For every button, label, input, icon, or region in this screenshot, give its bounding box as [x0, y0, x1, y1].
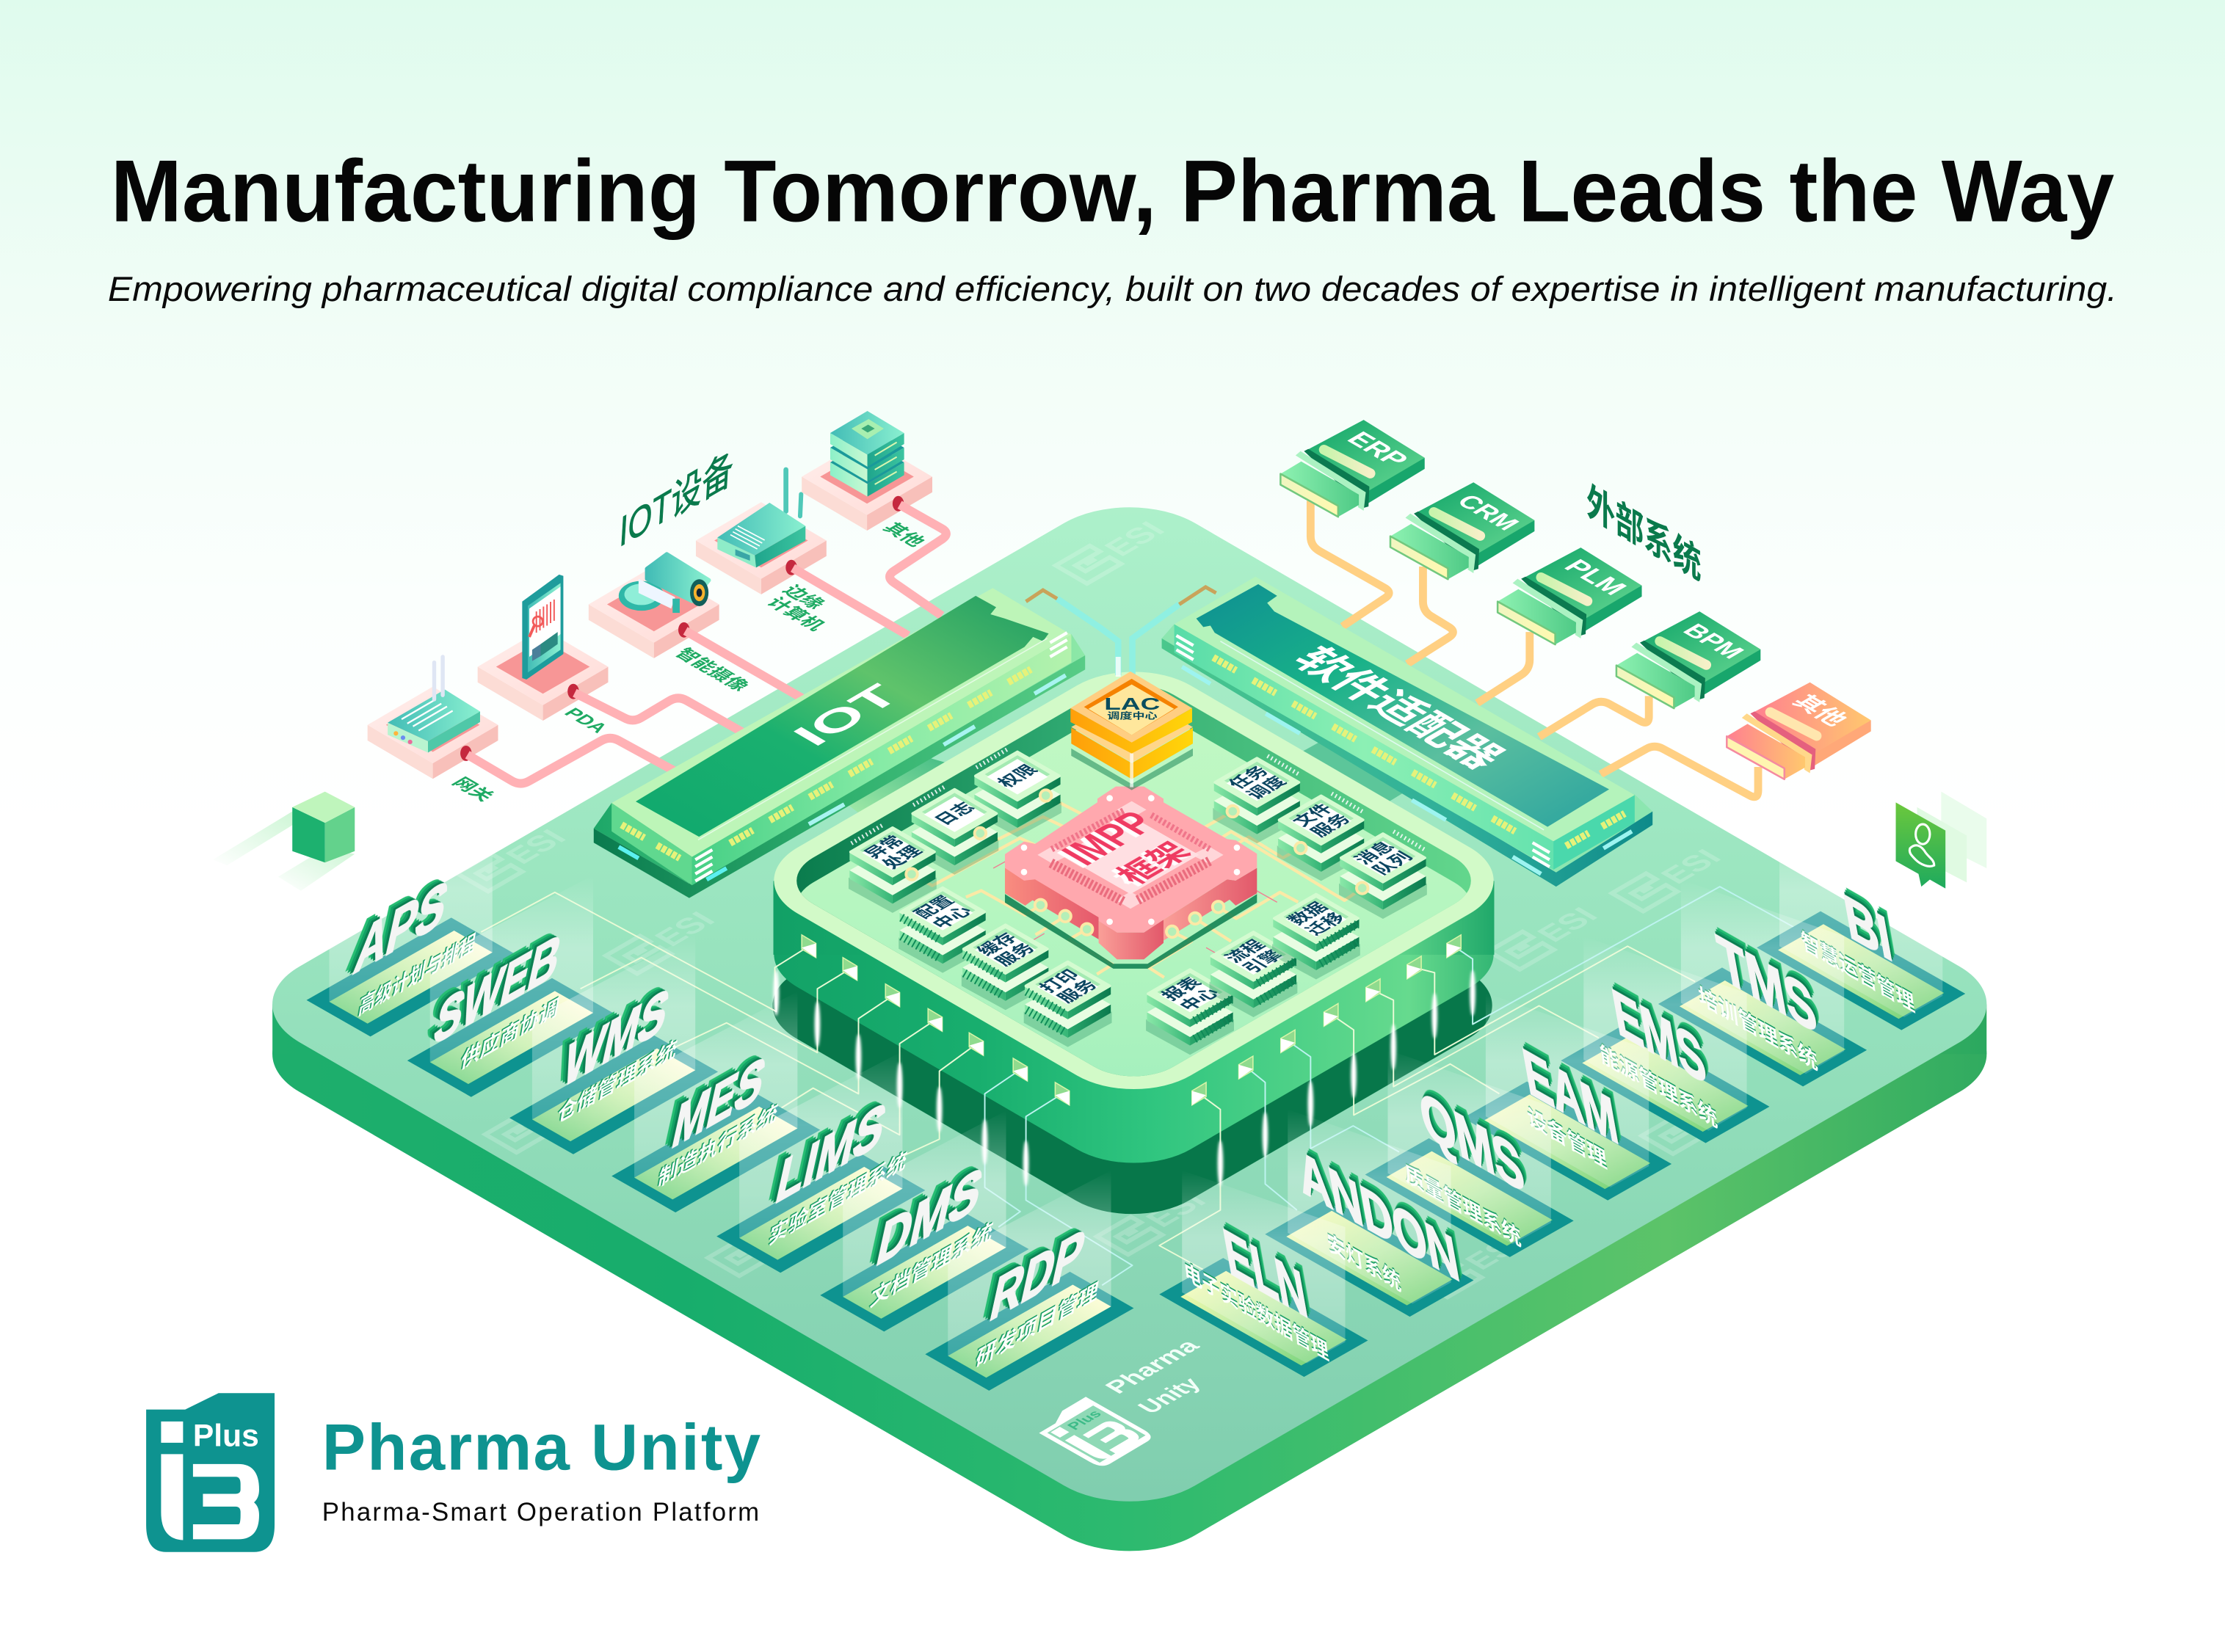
card: other [1727, 683, 1871, 779]
module: 打印服务: 打印 [1035, 967, 1084, 995]
device: camera [589, 554, 719, 658]
cyan connectors from LAC [1026, 587, 1216, 677]
watermarks: ESI [498, 825, 573, 868]
system box: ELN [1159, 1171, 1368, 1377]
module: 文件服务 [1277, 793, 1365, 881]
main platform [234, 485, 2025, 1573]
logo: i3 Plus [146, 1393, 275, 1552]
module: 报表中心: 中心 [1175, 985, 1224, 1014]
module: 打印服务: 服务 [1053, 978, 1102, 1005]
text: LAC: LAC [1104, 694, 1161, 713]
module: 流程引擎: 流程 [1221, 937, 1270, 966]
system box: WMS: 仓储管理系统 [556, 1036, 679, 1128]
lines: external system connectors [1310, 501, 1758, 797]
module: 权限 [973, 749, 1061, 837]
text: IOT: IOT [782, 678, 910, 752]
watermarks: ESI [1175, 729, 1250, 774]
floating chat icon [1896, 792, 1986, 889]
label: edge computer: 计算机 [762, 594, 830, 633]
watermarks: ESI [647, 907, 722, 950]
system box: BI [1757, 823, 1965, 1030]
system box: EMS [1561, 936, 1769, 1143]
plugs on device lines [460, 496, 904, 761]
LAC dispatch center [1070, 672, 1193, 790]
system box: DMS: 文档管理系统 [868, 1218, 995, 1312]
module: 消息队列 [1339, 830, 1427, 919]
module: 任务调度 [1213, 754, 1301, 843]
system box: EMS: 能源管理系统 [1598, 1041, 1719, 1132]
subtitle: Empowering pharmaceutical digital compliance and efficiency, built on two decades of expertise in intelligent manufacturing. [108, 270, 2117, 309]
circuit pads [906, 790, 1368, 937]
ports on center block [802, 935, 1461, 1105]
system box: ANDON: 安灯系统 [1326, 1230, 1403, 1296]
system box: TMS [1658, 879, 1867, 1086]
system box: APS: 高级计划与排程 [357, 930, 477, 1020]
module: 消息队列: 消息 [1350, 839, 1399, 867]
system box: WMS [509, 934, 718, 1154]
module: 缓存服务: 服务 [991, 940, 1039, 969]
system box: BI: 智慧运营管理 [1800, 928, 1916, 1017]
brand tagline: Pharma-Smart Operation Platform [322, 1499, 759, 1527]
module: 打印服务 [1024, 962, 1112, 1047]
module: 日志: 日志 [930, 799, 979, 828]
system box: APS [307, 815, 515, 1036]
device: edge computer [696, 470, 827, 594]
platform brand mark [1032, 1336, 1208, 1469]
watermarks: ESI [526, 1086, 602, 1129]
system box: ELN: ELN [1219, 1215, 1313, 1333]
card: PLM [1498, 547, 1642, 644]
system box: ANDON: ANDON [1293, 1135, 1464, 1296]
text: Pharma: Pharma [1100, 1336, 1206, 1397]
module: 配置中心 [899, 888, 987, 973]
system box: EAM: EAM [1518, 1034, 1623, 1159]
watermarks: ESI [1530, 903, 1605, 947]
card: ERP [1280, 420, 1425, 517]
system box: APS: APS [349, 865, 454, 989]
module: 报表中心 [1146, 969, 1234, 1055]
system box: RDP [925, 1171, 1133, 1391]
card: PLM: PLM [1558, 556, 1633, 599]
system box: BI: BI [1839, 879, 1897, 975]
system box: MES [611, 991, 820, 1212]
system box: EAM [1463, 993, 1672, 1201]
module: 权限: 权限 [993, 762, 1042, 790]
module: 缓存服务 [962, 925, 1050, 1010]
watermarks: ESI [1097, 517, 1172, 561]
module: 数据迁移 [1272, 895, 1360, 980]
module: 任务调度: 任务 [1224, 763, 1273, 792]
system box: LIMS: LIMS [770, 1087, 892, 1218]
system box: SWEB [407, 876, 616, 1097]
device: gateway [368, 657, 498, 779]
line: IOT connectors to devices [468, 505, 946, 784]
card: BPM: BPM [1677, 620, 1749, 663]
watermarks: ESI [1138, 1188, 1213, 1231]
system box: QMS: QMS [1415, 1077, 1529, 1207]
heading: IOT devices: IOT设备 [618, 444, 735, 557]
module: 异常处理: 处理 [878, 843, 926, 872]
floating cube [213, 792, 355, 891]
light glows on lines [774, 970, 1476, 1186]
system box: QMS: 质量管理系统 [1404, 1160, 1522, 1251]
system box: RDP: RDP [984, 1214, 1091, 1336]
system box: DMS: DMS [871, 1152, 989, 1281]
logo: i3 Plus: Plus [193, 1419, 259, 1454]
watermarks: ESI [749, 1209, 824, 1253]
module: 流程引擎 [1210, 932, 1297, 1017]
card: ERP: ERP [1340, 428, 1415, 470]
module: 文件服务: 文件 [1288, 801, 1337, 829]
watermarks: ESI [1653, 845, 1728, 888]
title: Manufacturing Tomorrow, Pharma Leads the Way [111, 143, 2114, 241]
module: 日志 [910, 786, 998, 875]
watermarks: ESI [1457, 1231, 1533, 1274]
module: 缓存服务: 缓存 [973, 930, 1022, 958]
system box: RDP: 研发项目管理 [974, 1278, 1100, 1372]
module: 异常处理: 异常 [860, 833, 909, 862]
text: dispatch center: 调度中心 [1107, 710, 1158, 721]
block: software adapter [1162, 577, 1652, 887]
brand name: Pharma Unity [322, 1411, 761, 1484]
card: CRM [1390, 482, 1534, 579]
system box: LIMS: 实验室管理系统 [767, 1148, 909, 1251]
system box: WMS: WMS [558, 973, 675, 1102]
system box: DMS [820, 1111, 1028, 1331]
text: IMPP: IMPP [1050, 804, 1166, 872]
module: 数据迁移: 迁移 [1302, 910, 1350, 938]
label: gateway: 网关 [448, 774, 498, 804]
system box: LIMS [716, 1051, 925, 1273]
device: server stack [802, 411, 932, 531]
module: 数据迁移: 数据 [1283, 900, 1332, 928]
system box: ANDON [1265, 1110, 1473, 1317]
card: CRM: CRM [1451, 491, 1525, 534]
lines: modules to ports [481, 887, 1795, 1285]
chip: IMPP framework [1005, 787, 1257, 969]
system box: MES: 制造执行系统 [656, 1100, 780, 1192]
module: 消息队列: 队列 [1368, 849, 1417, 878]
platform brand mark: Plus [1064, 1408, 1106, 1433]
text: software adapter title: 软件适配器 [1283, 641, 1515, 775]
system box: SWEB: 供应商协调 [459, 994, 561, 1074]
system box: EMS: EMS [1607, 975, 1711, 1099]
label: PDA: PDA [559, 705, 611, 736]
watermarks [457, 516, 1758, 1298]
system box: TMS: TMS [1712, 921, 1822, 1048]
system box: EAM: 设备管理 [1526, 1104, 1608, 1173]
text: framework: 框架 [1111, 838, 1198, 889]
block: IOT [594, 588, 1085, 898]
device: PDA [478, 575, 609, 721]
module: 流程引擎: 引擎 [1238, 947, 1288, 976]
system box: MES: MES [667, 1041, 772, 1162]
module: 报表中心: 报表 [1157, 975, 1207, 1003]
system box: QMS [1365, 1049, 1574, 1257]
watermarks: ESI [1683, 1087, 1758, 1131]
heading: external systems: 外部系统 [1586, 479, 1702, 589]
label: other devices: 其他 [879, 520, 929, 550]
module: 任务调度: 调度 [1242, 774, 1291, 802]
label: smart camera: 智能摄像 [670, 646, 754, 694]
text: other: 其他 [1787, 691, 1852, 729]
circuit traces [912, 796, 1362, 978]
connector ramps to center [843, 739, 1415, 818]
text: Unity: Unity [1133, 1374, 1208, 1417]
module: 配置中心: 中心 [928, 903, 977, 932]
module: 异常处理 [849, 824, 937, 913]
system box: ELN: 电子实验数据管理 [1183, 1259, 1330, 1366]
card: BPM [1616, 611, 1760, 708]
system box: TMS: 培训管理系统 [1697, 983, 1819, 1075]
center block base [739, 777, 1525, 1233]
system box: SWEB: SWEB [429, 919, 567, 1059]
module: 文件服务: 服务 [1306, 812, 1355, 840]
center block [774, 672, 1495, 1162]
module: 配置中心: 配置 [910, 893, 959, 921]
label: edge computer: 边缘 [778, 583, 829, 612]
